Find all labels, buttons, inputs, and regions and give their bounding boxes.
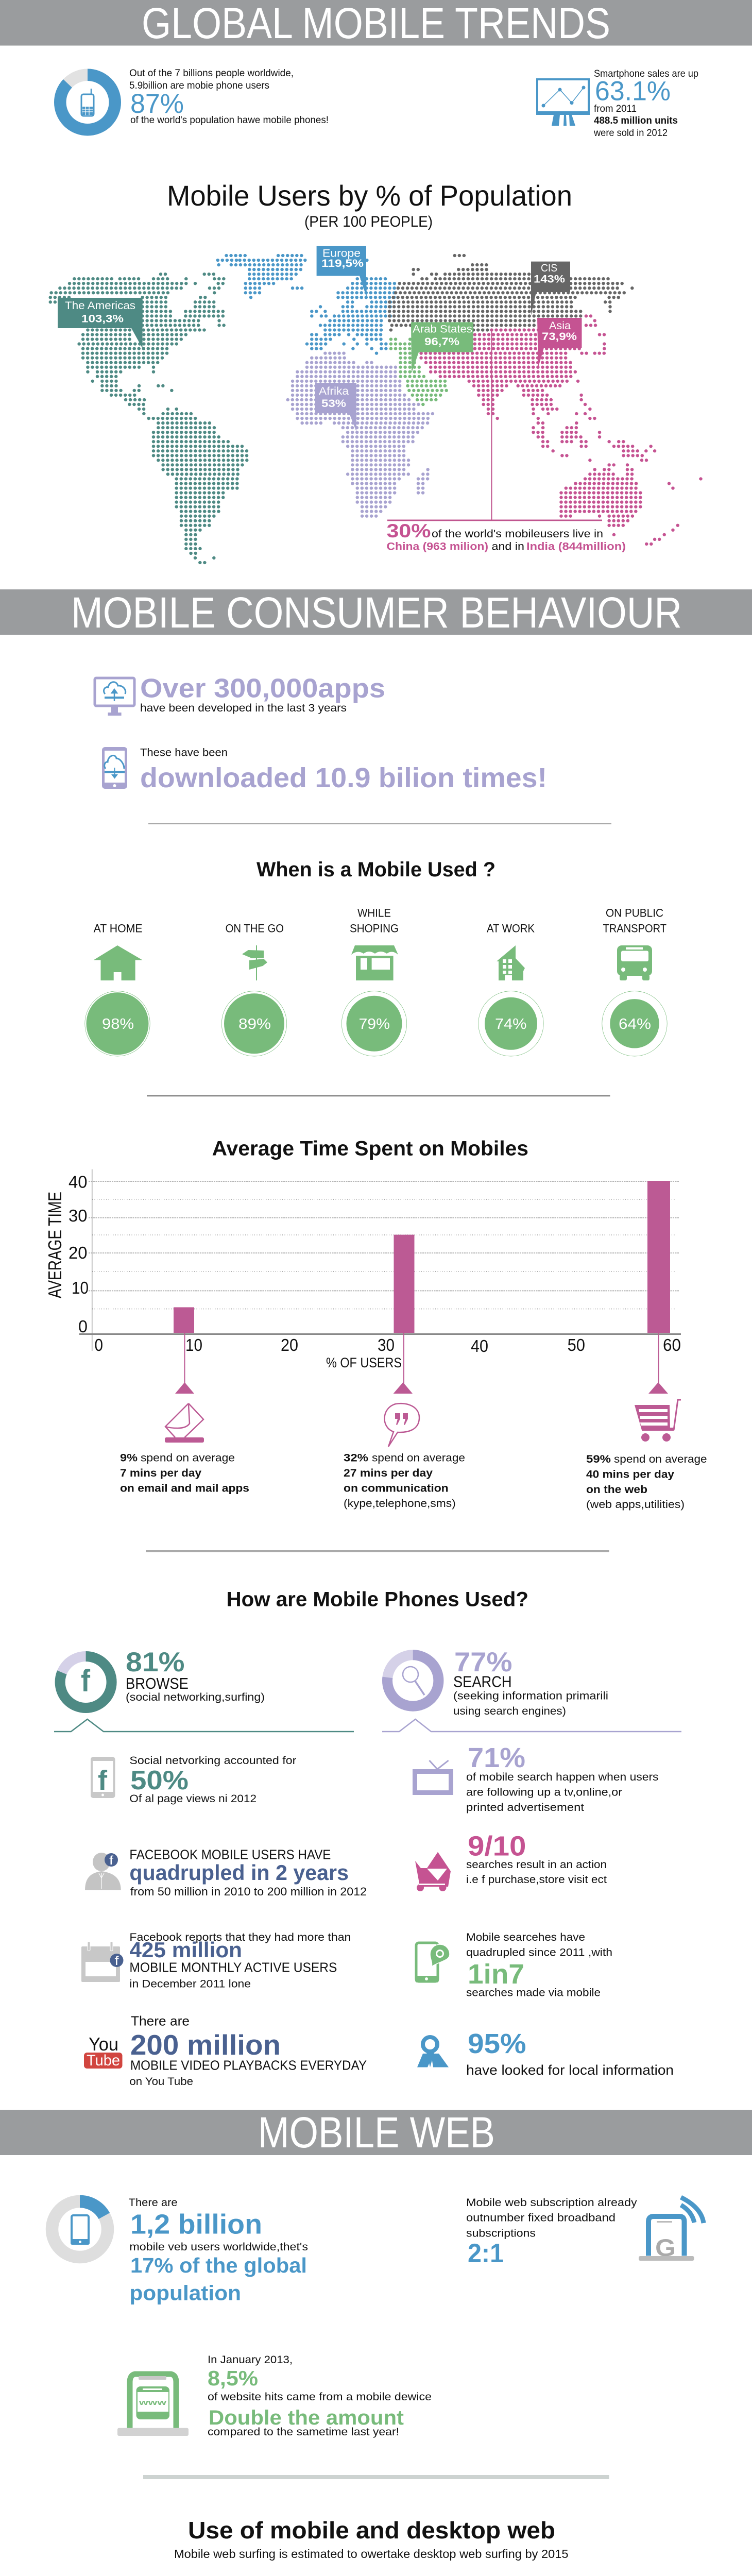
stat: downloaded 10.9 billion times <box>102 747 547 793</box>
stat: 8.5 percent of website hits: Double the amount <box>209 2406 404 2429</box>
heading: use of mobile and desktop web: Mobile web surfing is estimated to owertake desktop web surfing by 2015 <box>174 2547 569 2561</box>
section band: mobile web <box>0 2108 752 2157</box>
item: on public transport 64 percent: TRANSPORT <box>603 922 666 935</box>
stat: 425 million mobile monthly active users: MOBILE MONTHLY ACTIVE USERS <box>129 1960 337 1975</box>
heading: use of mobile and desktop web <box>174 2517 569 2561</box>
stat: 200 million youtube playbacks: Tube <box>87 2052 120 2069</box>
stat: 1 in 7 searches made via mobile: quadrupled since 2011 ,with <box>466 1946 612 1959</box>
stat: over 300,000 apps <box>95 674 385 716</box>
stat: 77 percent search: using search engines) <box>453 1705 566 1717</box>
stat: 9 of 10 searches result in action: 9/10 <box>468 1831 526 1862</box>
stat: 77 percent search: (seeking information primarili <box>453 1690 608 1702</box>
callout: The Americas: 103,3% <box>81 313 124 325</box>
callout: Arab States: 96,7% <box>424 336 459 348</box>
stat: social networking 50 percent: 50% <box>130 1766 189 1795</box>
section band: global mobile trends: GLOBAL MOBILE TRENDS <box>142 0 610 47</box>
stat: 1.2 billion mobile web users: There are <box>129 2197 178 2209</box>
text: on the web: (web apps,utilities) <box>586 1499 685 1511</box>
text: communication: spend on average <box>372 1452 465 1464</box>
text: email and mail apps: spend on average <box>141 1452 235 1464</box>
item: on public transport 64 percent <box>602 906 667 1056</box>
stat: smartphone sales up 63.1 percent: 63.1% <box>595 76 671 106</box>
heading: mobile users by percent of population <box>167 179 572 230</box>
bar chart: average time spent: 0 <box>95 1335 103 1354</box>
bar chart: average time spent: 30 <box>69 1206 88 1225</box>
stat: 425 million mobile monthly active users: in December 2011 lone <box>129 1978 251 1990</box>
stat: 81 percent browse: BROWSE <box>126 1674 189 1692</box>
callout: Arab States <box>411 322 473 373</box>
stat: 87 percent of the population has mobile phones: 5.9billion are mobie phone users <box>129 80 269 91</box>
callout: CIS: CIS <box>541 262 557 274</box>
stat: 71 percent of mobile search <box>415 1742 658 1814</box>
stat: 77 percent search: 77% <box>454 1647 512 1677</box>
item: on the go 89 percent: ON THE GO <box>226 922 284 935</box>
stat: 8.5 percent of website hits: www <box>138 2398 166 2407</box>
stat: 8.5 percent of website hits: 8,5% <box>208 2366 258 2390</box>
item: at work 74 percent <box>478 922 543 1056</box>
callout: CIS: 143% <box>534 274 565 285</box>
stat: 81 percent browse: (social networking,surfing) <box>126 1691 265 1703</box>
heading: how are mobile phones used: How are Mobile Phones Used? <box>227 1588 528 1611</box>
callout: 30 percent live in China and India: and in <box>491 541 524 553</box>
stat: 8.5 percent of website hits <box>117 2354 432 2438</box>
stat: 200 million youtube playbacks: You <box>89 2033 118 2055</box>
stat: 200 million youtube playbacks: on You Tube <box>129 2076 193 2088</box>
stat: 81 percent browse <box>60 1647 265 1708</box>
stat: 8.5 percent of website hits: compared to the sametime last year! <box>208 2426 399 2438</box>
stat: 9 of 10 searches result in action <box>415 1831 607 1891</box>
stat: smartphone sales up 63.1 percent: were sold in 2012 <box>593 128 668 139</box>
callout: Asia: Asia <box>549 320 571 332</box>
bar chart: average time spent: 20 <box>281 1335 298 1354</box>
stat: 1 in 7 searches made via mobile: searches made via mobile <box>466 1987 601 1999</box>
callout: Asia: 73,9% <box>542 331 577 343</box>
stat: 425 million mobile monthly active users: Facebook reports that they had more than <box>129 1931 351 1943</box>
stat: 71 percent of mobile search: 71% <box>468 1742 525 1773</box>
stat: mobile subscriptions 2 to 1 <box>466 2197 637 2268</box>
heading: use of mobile and desktop web: Use of mobile and desktop web <box>188 2517 555 2544</box>
bar chart: average time spent: 0 <box>78 1317 88 1336</box>
stat: mobile subscriptions 2 to 1: subscriptions <box>466 2228 536 2240</box>
text: communication: 27 mins per day <box>344 1467 433 1479</box>
stat: downloaded 10.9 billion times: These have been <box>140 747 228 758</box>
text: communication: 32% <box>344 1452 368 1464</box>
item: on the go 89 percent <box>221 922 287 1056</box>
bar chart: average time spent: 40 <box>471 1336 488 1355</box>
callout: Europe: 119,5% <box>321 258 364 269</box>
stat: 9 of 10 searches result in action: i.e f purchase,store visit ect <box>466 1874 607 1886</box>
heading: mobile users by percent of population: Mobile Users by % of Population <box>167 179 572 212</box>
bar chart: average time spent: 20 <box>69 1243 88 1262</box>
stat: mobile subscriptions 2 to 1: 2:1 <box>468 2239 504 2268</box>
stat: over 300,000 apps: Over 300,000apps <box>140 674 385 704</box>
callout: Afrika: 53% <box>321 398 346 410</box>
bar chart: average time spent: 40 <box>69 1173 88 1192</box>
icon: speech bubble <box>384 1403 419 1447</box>
stat: 87 percent of the population has mobile phones: 87% <box>130 89 184 119</box>
callout: The Americas <box>58 298 143 348</box>
stat: facebook mobile users quadrupled: f <box>109 1854 113 1868</box>
callout: Afrika: Afrika <box>319 385 349 397</box>
item: at home 98 percent <box>85 922 150 1056</box>
stat: 95 percent local information <box>417 2028 674 2078</box>
stat: facebook mobile users quadrupled <box>85 1846 367 1898</box>
text: email and mail apps: 7 mins per day <box>120 1467 201 1479</box>
callout: 30 percent live in China and India: of the world's mobileusers live in <box>432 528 603 540</box>
stat: mobile subscriptions 2 to 1: outnumber fixed broadband <box>466 2212 616 2224</box>
stat: 77 percent search: SEARCH <box>453 1672 512 1690</box>
item: at work 74 percent: 74% <box>495 1016 526 1032</box>
stat: over 300,000 apps: have been developed in the last 3 years <box>140 702 347 714</box>
stat: 200 million youtube playbacks <box>84 2013 367 2088</box>
text: communication <box>344 1452 465 1510</box>
stat: 1 in 7 searches made via mobile: Mobile searcehes have <box>466 1931 585 1943</box>
arrows from bars to icons <box>175 1328 668 1394</box>
stat: 1.2 billion mobile web users: 1,2 billion <box>130 2209 262 2240</box>
item: on public transport 64 percent: 64% <box>619 1016 651 1032</box>
stat: downloaded 10.9 billion times: downloaded 10.9 bilion times! <box>140 762 547 793</box>
item: at home 98 percent: 98% <box>102 1016 134 1032</box>
stat: smartphone sales up 63.1 percent: 488.5 million units <box>594 115 678 126</box>
section band: mobile web: MOBILE WEB <box>258 2108 495 2157</box>
bar chart: average time spent: 50 <box>568 1335 585 1354</box>
callout: Afrika <box>315 383 356 432</box>
item: on the go 89 percent: 89% <box>238 1016 271 1032</box>
callout: 30 percent live in China and India <box>386 329 626 553</box>
stat: smartphone sales up 63.1 percent: from 2011 <box>594 104 637 114</box>
stat: 1 in 7 searches made via mobile <box>415 1931 612 1999</box>
stat: 71 percent of mobile search: are following up a tv,online,or <box>466 1787 622 1798</box>
stat: 71 percent of mobile search: of mobile search happen when users <box>466 1771 658 1783</box>
pointer lines under browse and search <box>54 1719 681 1732</box>
stat: social networking 50 percent: Of al page views ni 2012 <box>129 1793 257 1805</box>
stat: 81 percent browse: f <box>81 1664 91 1698</box>
bar chart: average time spent: 10 <box>72 1278 89 1297</box>
heading: average time spent on mobiles: Average Time Spent on Mobiles <box>212 1138 528 1160</box>
icon: 3G tower signal <box>639 2197 704 2261</box>
text: on the web: spend on average <box>614 1453 707 1465</box>
callout: 30 percent live in China and India: China (963 milion) <box>386 541 488 553</box>
heading: when is a mobile used: When is a Mobile Used ? <box>257 858 495 881</box>
bar chart: average time spent: AVERAGE TIME <box>44 1192 65 1298</box>
stat: 81 percent browse: 81% <box>126 1647 184 1677</box>
stat: 8.5 percent of website hits: In January 2013, <box>208 2354 293 2366</box>
item: while shopping 79 percent <box>341 906 407 1056</box>
bar chart: average time spent <box>44 1170 681 1370</box>
callout: 30 percent live in China and India: India (844million) <box>526 541 626 553</box>
callout: 30 percent live in China and India: 30% <box>386 520 431 541</box>
stat: facebook mobile users quadrupled: FACEBOOK MOBILE USERS HAVE <box>129 1846 331 1862</box>
stat: smartphone sales up 63.1 percent <box>536 69 698 139</box>
item: while shopping 79 percent: WHILE <box>357 906 391 919</box>
stat: 425 million mobile monthly active users: f <box>114 1954 119 1968</box>
stat: 87 percent of the population has mobile phones: of the world's population hawe mobile phones! <box>130 115 329 126</box>
stat: 95 percent local information: have looked for local information <box>466 2062 674 2078</box>
bar chart: average time spent: % OF USERS <box>326 1355 402 1370</box>
bar chart: average time spent: 60 <box>663 1335 681 1354</box>
stat: 200 million youtube playbacks: There are <box>131 2013 190 2029</box>
item: at work 74 percent: AT WORK <box>487 922 535 935</box>
callout: Europe <box>317 246 367 298</box>
callout: The Americas: The Americas <box>65 300 135 312</box>
callout: Arab States: Arab States <box>413 324 472 335</box>
item: on public transport 64 percent: ON PUBLIC <box>606 906 663 919</box>
item: while shopping 79 percent: 79% <box>358 1016 390 1032</box>
bar chart: average time spent: 10 <box>185 1335 202 1354</box>
icon: shopping cart <box>635 1400 681 1442</box>
stat: 95 percent local information: 95% <box>468 2028 526 2059</box>
text: email and mail apps: 9% <box>120 1452 138 1464</box>
stat: 8.5 percent of website hits: of website hits came from a mobile dewice <box>208 2391 432 2403</box>
stat: facebook mobile users quadrupled: from 50 million in 2010 to 200 million in 2012 <box>130 1885 367 1898</box>
text: on the web: 40 mins per day <box>586 1469 674 1481</box>
text: email and mail apps: on email and mail apps <box>120 1483 249 1495</box>
text: communication: on communication <box>344 1483 449 1495</box>
text: communication: (kype,telephone,sms) <box>344 1498 456 1510</box>
stat: 1.2 billion mobile web users: population <box>129 2281 241 2305</box>
stat: 87 percent of the population has mobile phones: Out of the 7 billions people worldwide, <box>129 68 294 79</box>
stat: social networking 50 percent <box>91 1755 296 1805</box>
stat: 1.2 billion mobile web users: mobile veb users worldwide,thet's <box>129 2241 308 2253</box>
text: on the web <box>586 1453 707 1511</box>
icon: 3G tower signal: G <box>655 2234 676 2261</box>
callout: CIS <box>531 262 570 315</box>
text: on the web: on the web <box>586 1484 647 1496</box>
stat: 87 percent of the population has mobile phones <box>60 68 329 130</box>
stat: 1 in 7 searches made via mobile: 1in7 <box>468 1959 524 1990</box>
stat: 1.2 billion mobile web users <box>52 2197 308 2305</box>
stat: social networking 50 percent: f <box>98 1765 108 1796</box>
text: email and mail apps <box>120 1452 249 1495</box>
stat: 200 million youtube playbacks: 200 million <box>130 2029 281 2061</box>
stat: facebook mobile users quadrupled: quadrupled in 2 years <box>129 1860 349 1885</box>
stat: 77 percent search <box>387 1647 608 1717</box>
text: on the web: 59% <box>586 1453 611 1465</box>
stat: 9 of 10 searches result in action: searches result in an action <box>466 1859 607 1871</box>
item: at home 98 percent: AT HOME <box>94 922 143 935</box>
stat: 71 percent of mobile search: printed advertisement <box>466 1802 584 1814</box>
stat: 1.2 billion mobile web users: 17% of the global <box>130 2253 307 2277</box>
callout: Asia <box>537 318 582 367</box>
bar chart: average time spent: 30 <box>378 1335 395 1354</box>
section band: mobile consumer behaviour: MOBILE CONSUMER BEHAVIOUR <box>71 588 682 637</box>
callout: Europe: Europe <box>322 247 361 260</box>
icon: mail <box>165 1403 204 1443</box>
stat: smartphone sales up 63.1 percent: Smartphone sales are up <box>594 69 698 79</box>
stat: 425 million mobile monthly active users <box>81 1931 351 1990</box>
stat: 425 million mobile monthly active users: 425 million <box>129 1938 242 1962</box>
stat: 200 million youtube playbacks: MOBILE VIDEO PLAYBACKS EVERYDAY <box>130 2058 367 2073</box>
stat: mobile subscriptions 2 to 1: Mobile web subscription already <box>466 2197 637 2209</box>
heading: mobile users by percent of population: (PER 100 PEOPLE) <box>304 213 433 230</box>
item: while shopping 79 percent: SHOPING <box>350 922 399 935</box>
dotted world map <box>50 256 701 563</box>
stat: social networking 50 percent: Social netvorking accounted for <box>129 1755 296 1767</box>
